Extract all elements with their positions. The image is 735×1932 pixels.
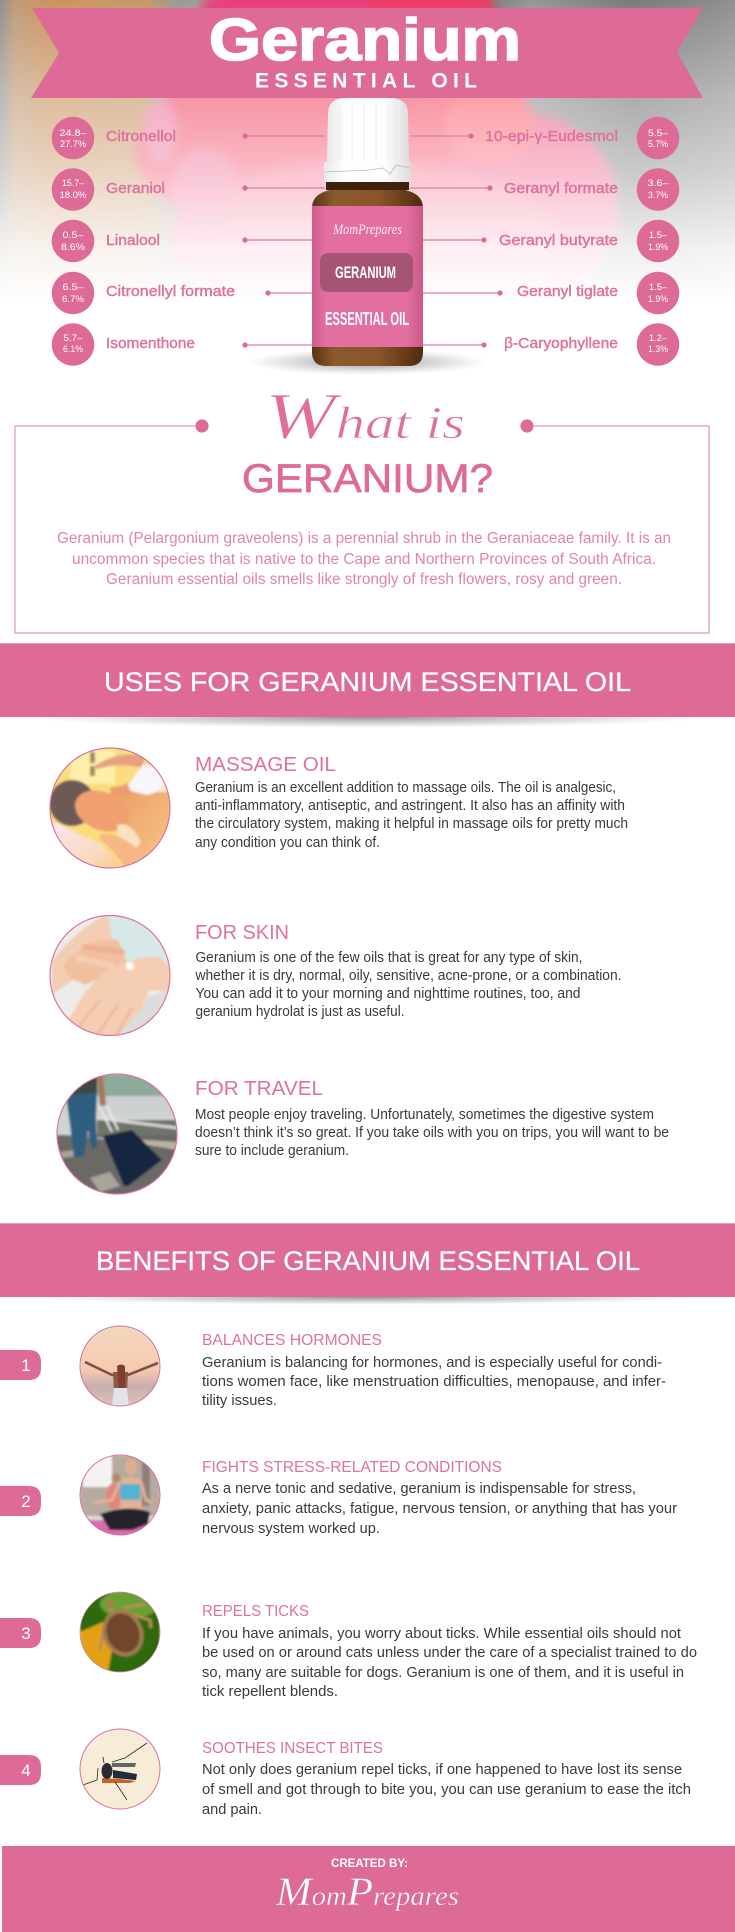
left compounds list: 8.6% bbox=[61, 242, 86, 253]
body text: anxiety, panic attacks, fatigue, nervous tension, or anything that has your bbox=[202, 1500, 677, 1517]
heading: Geranium?: GERANIUM? bbox=[242, 457, 493, 501]
section band: uses bbox=[0, 643, 735, 728]
right compounds list: 10-epi-γ-Eudesmol bbox=[485, 129, 618, 145]
label brand: MomPrepares bbox=[332, 222, 402, 238]
body text bbox=[202, 1761, 691, 1818]
body text: If you have animals, you worry about ticks. While essential oils should not bbox=[202, 1625, 682, 1642]
section band: benefits bbox=[0, 1223, 735, 1305]
right compounds list: 1.5– bbox=[649, 282, 668, 293]
body text: As a nerve tonic and sedative, geranium is indispensable for stress, bbox=[202, 1480, 636, 1497]
heading: massage oil: MASSAGE OIL bbox=[195, 754, 336, 776]
body text: of smell and got through to bite you, you can use geranium to ease the itch bbox=[202, 1781, 691, 1798]
benefit 3: repels ticks bbox=[0, 1590, 697, 1700]
label name plate bbox=[320, 253, 413, 292]
body text: sure to include geranium. bbox=[195, 1142, 349, 1159]
heading: BALANCES HORMONES bbox=[202, 1332, 382, 1349]
photo: massage bbox=[49, 747, 172, 870]
photo: hands applying cream bbox=[49, 915, 172, 1037]
left compounds list: 18.0% bbox=[60, 190, 87, 201]
photo: traveler with suitcase bbox=[56, 1074, 178, 1196]
label name plate: GERANIUM bbox=[335, 263, 396, 282]
body text bbox=[202, 1354, 666, 1409]
photo: tick on flower bbox=[80, 1590, 160, 1674]
body text: whether it is dry, normal, oily, sensitive, acne-prone, or a combination. bbox=[195, 967, 621, 984]
right compounds list: β-Caryophyllene bbox=[504, 336, 618, 352]
body text: geranium hydrolat is just as useful. bbox=[196, 1003, 404, 1020]
right compounds list: Geranyl formate bbox=[504, 181, 618, 197]
right compounds list: 3.7% bbox=[648, 190, 668, 201]
number tag 2: 2 bbox=[21, 1492, 31, 1511]
body text: so, many are suitable for dogs. Geranium is one of them, and it is useful in bbox=[202, 1664, 684, 1681]
description paragraph: Geranium (Pelargonium graveolens) is a perennial shrub in the Geraniaceae family. It is an bbox=[57, 530, 671, 547]
body text bbox=[195, 779, 628, 851]
right compounds list: 1.9% bbox=[648, 294, 668, 305]
right compounds list: 1.5– bbox=[649, 230, 668, 241]
number tag 4 bbox=[0, 1755, 41, 1785]
heading: REPELS TICKS bbox=[202, 1603, 309, 1620]
left compounds list: Isomenthone bbox=[106, 336, 195, 352]
body text: You can add it to your morning and nighttime routines, too, and bbox=[196, 985, 580, 1002]
left compounds list: Citronellyl formate bbox=[106, 284, 235, 300]
body text: tility issues. bbox=[202, 1392, 277, 1409]
left compounds list: Geraniol bbox=[106, 181, 165, 197]
body text: Not only does geranium repel ticks, if one happened to have lost its sense bbox=[202, 1761, 682, 1778]
body text: anti-inflammatory, antiseptic, and astringent. It also has an affinity with bbox=[195, 797, 625, 814]
body text bbox=[195, 949, 621, 1020]
body text bbox=[202, 1480, 677, 1537]
heading: SOOTHES INSECT BITES bbox=[202, 1740, 383, 1757]
left compounds list: 24.8– bbox=[60, 128, 87, 139]
right compounds list: 5.7% bbox=[648, 139, 668, 150]
use: for skin bbox=[49, 915, 622, 1037]
description paragraph bbox=[57, 530, 671, 588]
body text: tions women face, like menstruation difficulties, menopause, and infer- bbox=[202, 1373, 666, 1390]
body text: the circulatory system, making it helpful in massage oils for pretty much bbox=[195, 815, 628, 832]
description paragraph: uncommon species that is native to the Cape and Northern Provinces of South Africa. bbox=[72, 551, 656, 568]
left compounds list: Linalool bbox=[106, 233, 160, 249]
number tag 4: 4 bbox=[21, 1761, 31, 1780]
heading: FIGHTS STRESS-RELATED CONDITIONS bbox=[202, 1459, 502, 1476]
body text bbox=[195, 1106, 669, 1159]
use: for travel bbox=[56, 1074, 669, 1196]
left compounds list bbox=[52, 117, 235, 366]
body text: Geranium is balancing for hormones, and is especially useful for condi- bbox=[202, 1354, 662, 1371]
body text: any condition you can think of. bbox=[195, 834, 380, 851]
right compounds list: Geranyl tiglate bbox=[517, 284, 618, 300]
right compounds list: 1.9% bbox=[648, 242, 668, 253]
heading: for travel: FOR TRAVEL bbox=[195, 1078, 323, 1100]
left compounds list: 27.7% bbox=[60, 139, 86, 150]
title ribbon bbox=[31, 7, 703, 98]
number tag 3 bbox=[0, 1618, 41, 1648]
label essential oil: ESSENTIAL OIL bbox=[325, 309, 409, 329]
right compounds list: 3.6– bbox=[648, 178, 669, 189]
left compounds list: 15.7– bbox=[62, 178, 85, 189]
use: massage oil bbox=[49, 747, 628, 870]
right compounds list: 1.3% bbox=[648, 344, 668, 355]
benefit 2: fights stress bbox=[0, 1455, 677, 1537]
background photo: geranium flowers on planks bbox=[0, 0, 735, 280]
body text bbox=[202, 1625, 697, 1700]
connector lines from compounds to bottle bbox=[242, 133, 503, 348]
number tag 3: 3 bbox=[21, 1624, 31, 1643]
section band: benefits: BENEFITS OF GERANIUM ESSENTIAL OIL bbox=[96, 1246, 640, 1276]
body text: Geranium is one of the few oils that is great for any type of skin, bbox=[196, 949, 582, 966]
photo: mosquito on skin bbox=[80, 1729, 160, 1809]
right compounds list: Geranyl butyrate bbox=[499, 233, 618, 249]
number tag 2 bbox=[0, 1486, 41, 1516]
benefit 4: soothes insect bites bbox=[0, 1729, 691, 1818]
created by label: CREATED BY: bbox=[331, 1858, 408, 1870]
body text: doesn’t think it’s so great. If you take oils with you on trips, you will want to be bbox=[195, 1124, 669, 1141]
body text: tick repellent blends. bbox=[202, 1683, 338, 1700]
subtitle: Essential Oil: ESSENTIAL OIL bbox=[255, 70, 477, 92]
script heading: What is: W hat is bbox=[265, 380, 465, 453]
left compounds list: 5.7– bbox=[64, 333, 83, 344]
number tag 1 bbox=[0, 1350, 41, 1380]
body text: Most people enjoy traveling. Unfortunately, sometimes the digestive system bbox=[195, 1106, 654, 1123]
essential oil bottle bbox=[247, 98, 487, 375]
title: Geranium: Geranium bbox=[209, 7, 521, 73]
right compounds list: 5.5– bbox=[648, 128, 669, 139]
photo: yoga bbox=[80, 1455, 160, 1537]
heading: for skin: FOR SKIN bbox=[195, 922, 289, 944]
body text: and pain. bbox=[202, 1801, 262, 1818]
body text: nervous system worked up. bbox=[202, 1520, 380, 1537]
body text: be used on or around cats unless under the care of a specialist trained to do bbox=[202, 1644, 697, 1661]
photo: woman at sunset bbox=[80, 1325, 160, 1407]
right compounds list bbox=[485, 117, 679, 366]
left compounds list: Citronellol bbox=[106, 129, 176, 145]
body text: Geranium is an excellent addition to massage oils. The oil is analgesic, bbox=[195, 779, 616, 796]
left compounds list: 6.1% bbox=[63, 344, 83, 355]
brand script: MomPrepares bbox=[275, 1869, 459, 1914]
right compounds list: 1.2– bbox=[649, 333, 668, 344]
number tag 1: 1 bbox=[21, 1356, 31, 1375]
description paragraph: Geranium essential oils smells like strongly of fresh flowers, rosy and green. bbox=[106, 571, 622, 588]
left compounds list: 6.5– bbox=[62, 282, 84, 293]
panel: what is geranium bbox=[15, 380, 709, 633]
left compounds list: 6.7% bbox=[62, 294, 84, 305]
benefit 1: balances hormones bbox=[0, 1325, 666, 1409]
left compounds list: 0.5– bbox=[62, 230, 84, 241]
footer bbox=[2, 1846, 735, 1932]
section band: uses: USES FOR GERANIUM ESSENTIAL OIL bbox=[104, 667, 631, 697]
